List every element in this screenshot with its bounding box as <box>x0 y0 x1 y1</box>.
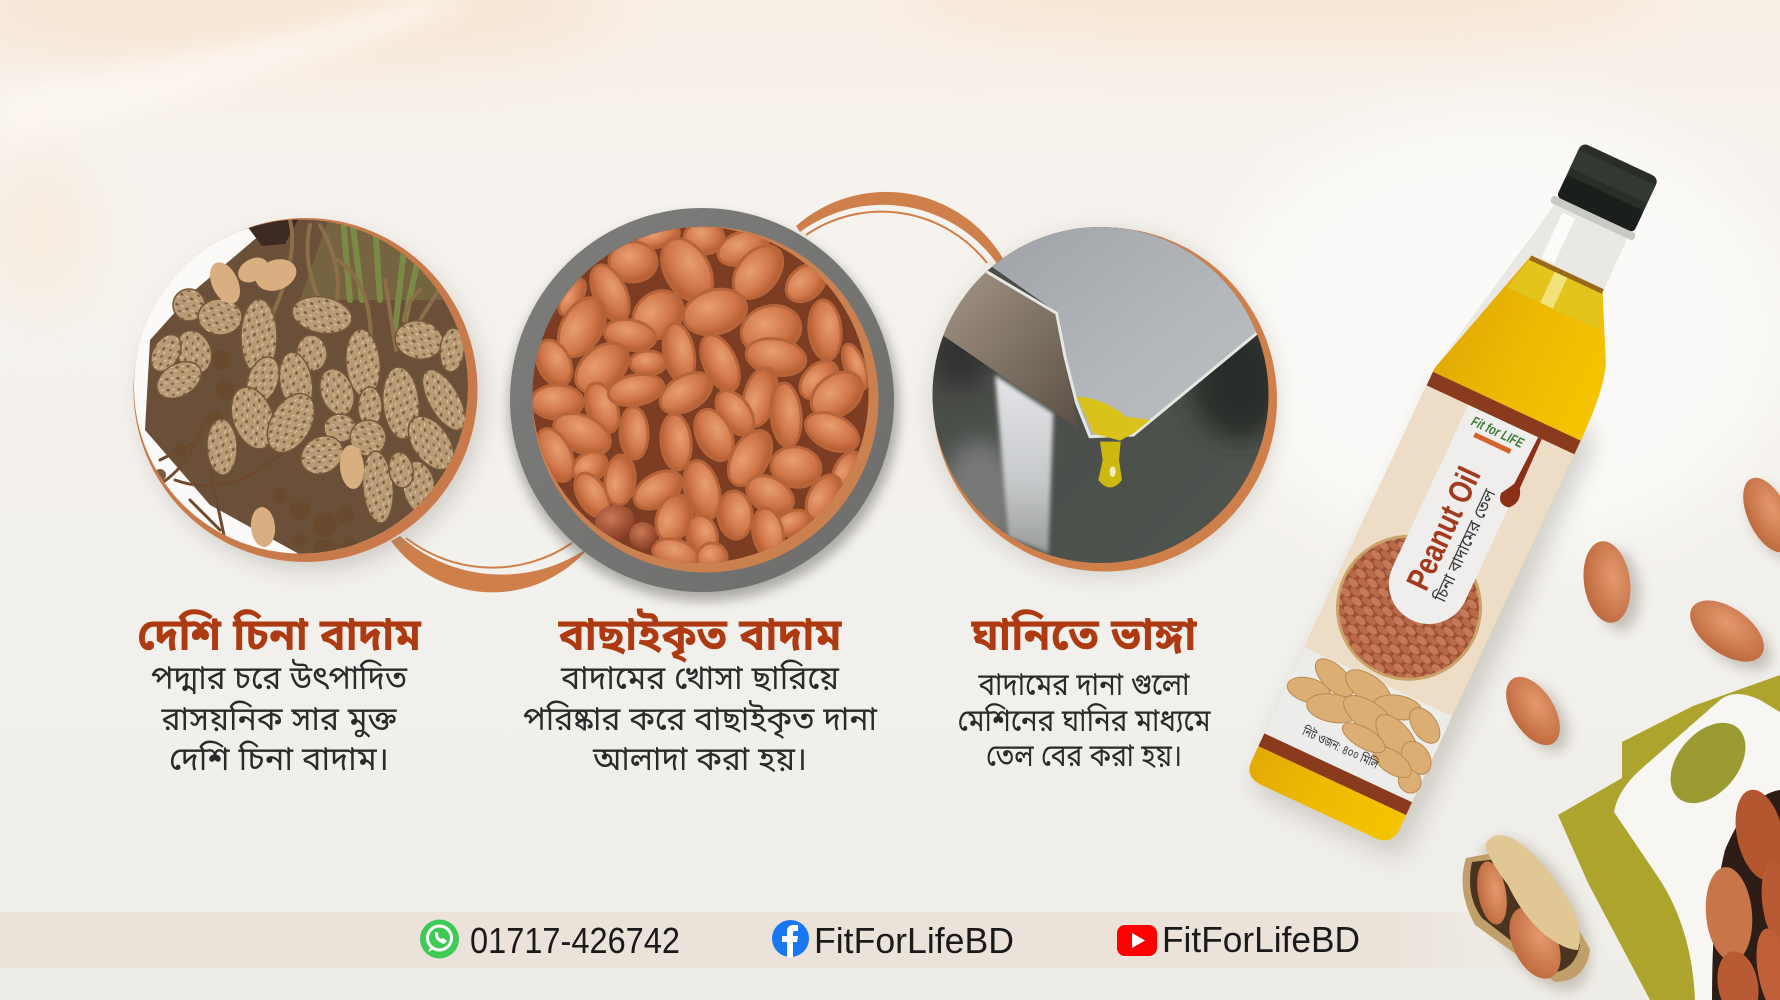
heading: pressed in mill: ঘানিতে ভাঙ্গা <box>971 608 1198 660</box>
text block: selected peanuts: বাদামের খোসা ছারিয়ে <box>560 658 839 696</box>
facebook name: FitForLifeBD <box>814 920 1014 961</box>
text block: pressed in mill <box>958 667 1211 773</box>
peanut shell with kernels <box>1456 820 1614 1000</box>
photo circle: oil dripping from press <box>930 220 1290 576</box>
text block: selected peanuts: পরিষ্কার করে বাছাইকৃত দানা <box>523 699 878 740</box>
bottle subtitle: চিনা বাদামের তেল <box>1429 485 1500 606</box>
photo circle: selected peanut kernels <box>509 208 899 601</box>
oil bottle <box>1238 125 1709 861</box>
bottle logo: Fit for LIFE <box>1469 413 1527 451</box>
arc connector top <box>796 192 1005 268</box>
bottle label <box>1257 371 1587 818</box>
text block: local peanuts: পদ্মার চরে উৎপাদিত <box>151 658 408 696</box>
icon: facebook <box>772 920 809 957</box>
almonds <box>1264 640 1462 803</box>
bottle cap <box>1557 142 1659 233</box>
heading: local peanuts: দেশি চিনা বাদাম <box>137 608 422 660</box>
green cloth <box>1558 675 1780 1000</box>
bottle drip <box>1497 433 1546 510</box>
text block: pressed in mill: বাদামের দানা গুলো <box>978 667 1190 702</box>
net weight: নিট ওজন: ৪০০ মিলি <box>1300 723 1381 772</box>
text block: local peanuts <box>151 658 408 777</box>
heading: selected peanuts: বাছাইকৃত বাদাম <box>558 608 842 663</box>
contact band <box>0 912 1780 968</box>
youtube name: FitForLifeBD <box>1162 919 1360 960</box>
phone number: 01717-426742 <box>470 920 680 961</box>
scattered peanut <box>1495 668 1579 761</box>
text block: local peanuts: রাসয়নিক সার মুক্ত <box>161 699 397 738</box>
text block: local peanuts: দেশি চিনা বাদাম। <box>169 739 389 777</box>
text block: selected peanuts: আলাদা করা হয়। <box>592 740 807 777</box>
scattered peanut <box>1679 588 1780 682</box>
text block: pressed in mill: তেল বের করা হয়। <box>986 738 1182 773</box>
text block: pressed in mill: মেশিনের ঘানির মাধ্যমে <box>958 703 1211 738</box>
bottle title: Peanut Oil <box>1399 461 1488 596</box>
text block: selected peanuts <box>523 658 878 777</box>
icon: youtube <box>1117 925 1157 956</box>
scattered peanut <box>1579 538 1643 633</box>
white dish with powder and peanuts <box>1614 694 1780 1000</box>
icon: whatsapp <box>420 920 459 958</box>
photo circle: peanut plants <box>130 215 482 570</box>
arc connector bottom <box>391 536 592 592</box>
scattered peanut <box>1733 470 1780 567</box>
